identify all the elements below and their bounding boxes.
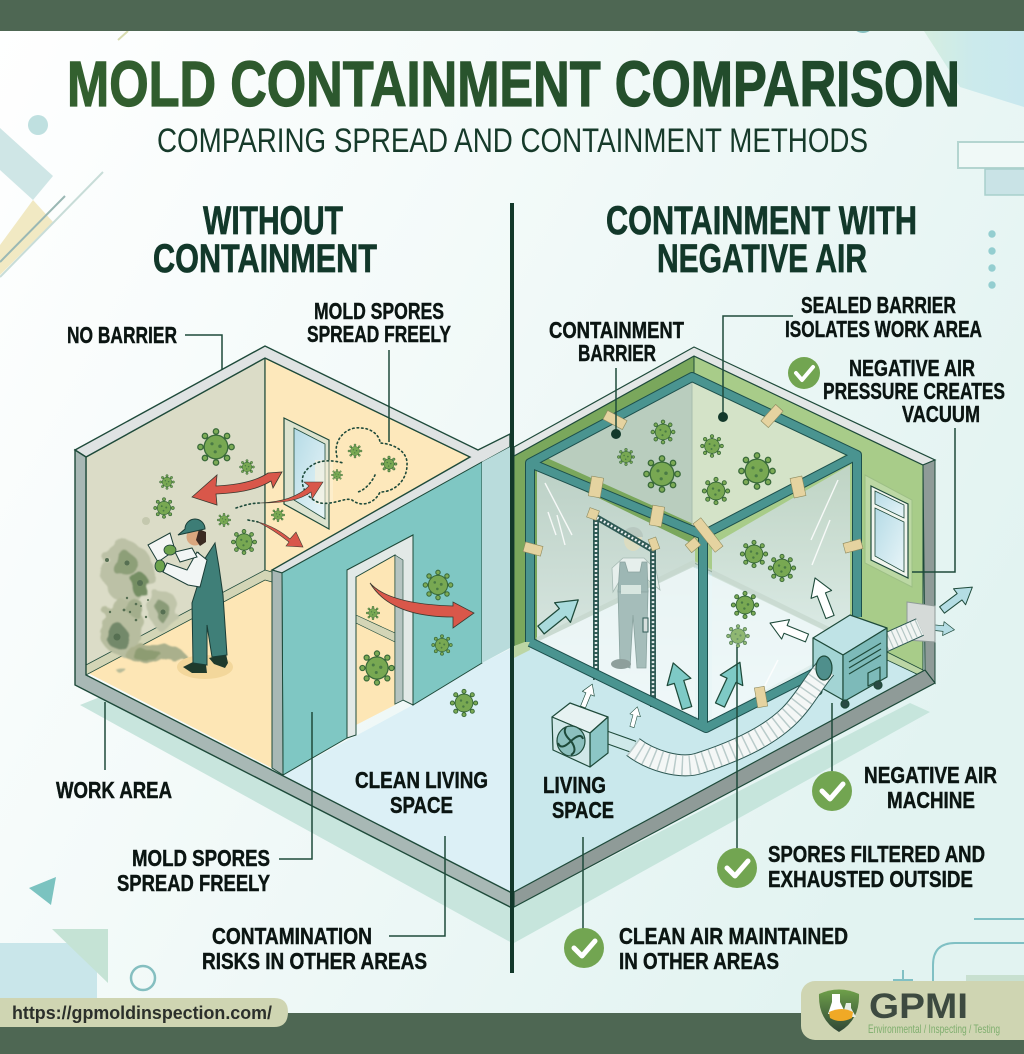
worker overalls [192,543,227,665]
right room floor [514,563,925,892]
logo badge [801,981,1024,1040]
label: clean air maintained: CLEAN AIR MAINTAINED [619,923,848,949]
label: mold spores spread freely top [307,298,451,442]
airflow arrows inside containment [533,574,978,728]
mold spores: inside containment [617,420,796,647]
decorative shapes: bottom left [0,877,155,1003]
machine hose collar [816,656,832,680]
label: spores filtered: EXHAUSTED OUTSIDE [768,866,973,892]
worker head and cap [178,519,206,546]
label: containment barrier [549,317,684,439]
worker [148,519,233,679]
gloves [155,545,176,572]
centre divider [510,203,514,973]
red arrow: double headed [192,472,282,505]
mold spores: left room [154,429,478,717]
tablet [148,533,175,562]
tent ceiling [547,382,845,533]
red arrow: to wall [258,522,303,547]
heading: containment with negative air: NEGATIVE AIR [657,237,867,281]
label: mold spores spread freely bottom [117,712,312,896]
room floor: living space [283,648,512,893]
label: negative air machine: MACHINE [887,787,975,813]
heading: containment with negative air: CONTAINMENT WITH [606,199,917,243]
label: mold spores spread freely top: SPREAD FREELY [307,321,451,347]
tent floor [537,567,850,722]
label: work area [56,702,172,803]
negative air machine [813,615,887,708]
label: no barrier: NO BARRIER [67,322,177,348]
wall translucent end [482,447,510,663]
top bar [0,0,1024,31]
mold growth on wall [100,517,178,656]
label: living space [543,772,614,930]
flexible duct hose [606,668,826,765]
label: negative air machine: NEGATIVE AIR [864,762,997,788]
wall top band [514,347,935,465]
decorative shapes: top left [0,31,128,277]
mold stain on floor [117,644,183,673]
icon: shield with flasks [819,990,859,1032]
right green wall [694,356,923,677]
label: clean air maintained: IN OTHER AREAS [619,948,779,974]
green baseboard [514,640,530,658]
wall end cap [272,570,283,775]
label: sealed barrier [718,292,982,422]
decorative shapes: bottom right [893,919,1024,985]
heading: without containment: CONTAINMENT [153,237,377,281]
illustration shadow: right [514,703,930,943]
wall top band [75,346,510,573]
red arrow: through door [370,583,474,628]
front teal wall [282,462,482,775]
tent panel right [712,465,850,722]
red arrow: to window [260,482,323,503]
label: clean living space: SPACE [390,792,453,818]
door opening [356,555,395,725]
label: contamination risks: RISKS IN OTHER AREAS [202,948,427,974]
left wall cut band [75,450,512,908]
heading: containment with negative air [606,199,917,281]
label: mold spores spread freely bottom: SPREAD FREELY [117,870,270,896]
door baseboard [356,615,395,642]
label: containment barrier: CONTAINMENT [549,317,684,343]
barrier tape strips [523,404,863,708]
baseboard [86,570,272,675]
label: sealed barrier: SEALED BARRIER [801,292,956,318]
label: work area: WORK AREA [56,777,172,803]
zipper door [596,517,653,707]
window [284,418,333,529]
label: clean living space [355,767,488,818]
fan box [552,703,608,767]
bottom bar [0,1013,1024,1054]
label: contamination risks: CONTAMINATION [212,923,372,949]
label: negative air pressure: NEGATIVE AIR [849,355,975,381]
label: clean air maintained [564,923,848,974]
plastic sheen highlights [545,480,838,695]
spreading dotted cloud [302,428,407,504]
label: mold spores spread freely top: MOLD SPORES [314,298,444,324]
label: mold spores spread freely bottom: MOLD SPORES [132,845,270,871]
panel: room with containment [514,347,978,907]
ghost worker behind plastic [611,527,660,669]
dotted spore trails [236,503,260,522]
exhaust wall patch [907,602,935,642]
exhaust hose [880,627,920,645]
label: living space: LIVING [543,772,606,798]
label: living space: SPACE [552,797,614,823]
tent floor faint baseboards [537,563,850,640]
label: no barrier [67,322,222,370]
window in green wall [865,475,912,587]
label: negative air pressure: VACUUM [902,401,980,427]
label: negative air machine [812,703,997,813]
room floor: work area [86,575,282,775]
heading: without containment: WITHOUT [203,199,343,243]
left green wall [514,356,694,655]
right grey wall cut [923,460,935,683]
illustration shadow: left [80,695,512,943]
worker far arm [175,548,197,562]
label: containment barrier: BARRIER [578,340,656,366]
subtitle: COMPARING SPREAD AND CONTAINMENT METHODS [157,122,868,160]
right back wall [265,358,470,575]
tent panel left [537,468,695,722]
label: contamination risks [202,836,445,974]
label: negative air pressure [788,355,1005,572]
website pill: https://gpmoldinspection.com/ [12,1003,272,1023]
logo wordmark: GPMI [869,987,968,1026]
worker boots [183,654,228,673]
label: clean living space: CLEAN LIVING [355,767,488,793]
heading: without containment [153,199,377,281]
containment frame tube [530,377,857,728]
left back wall [86,358,265,668]
door frame [347,535,413,738]
label: spores filtered [717,647,985,892]
panel: room without containment [75,346,512,908]
base grey band [514,670,935,907]
website pill [0,998,288,1027]
decorative shapes: top right [852,10,1024,289]
worker near arm [163,552,207,587]
